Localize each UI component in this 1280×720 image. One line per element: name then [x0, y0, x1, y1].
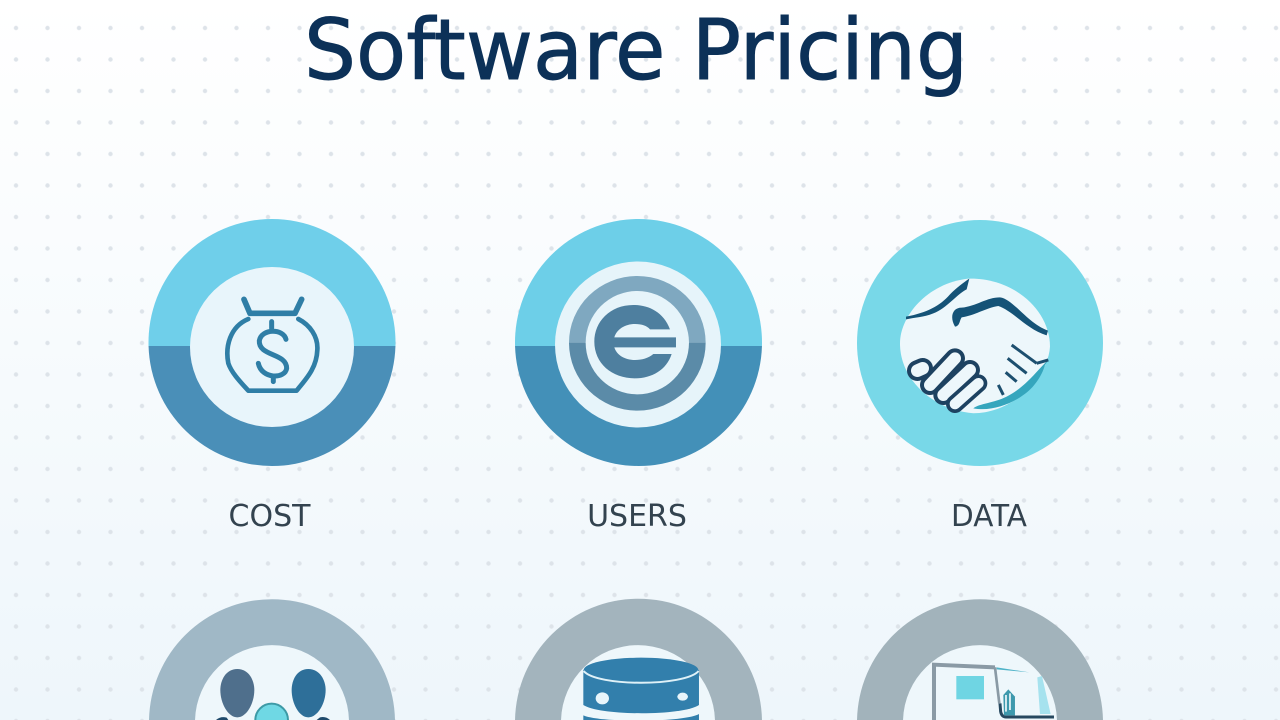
icon: cost disc: [148, 219, 396, 466]
label: cost: COST: [229, 499, 311, 534]
icon: database ring: [515, 599, 762, 720]
icon: e symbol: [569, 276, 706, 411]
icon: data disc: [857, 220, 1103, 466]
panel: document: [857, 599, 1103, 720]
title: Software Pricing: [304, 1, 968, 99]
panel: cost: [148, 219, 396, 534]
icon: document ring: [857, 599, 1103, 720]
icon: money bag: [227, 299, 317, 391]
label: data: DATA: [951, 499, 1027, 534]
icon: people ring: [149, 599, 395, 720]
panel: people: [149, 599, 395, 720]
label: users: USERS: [587, 499, 687, 534]
icon: handshake: [900, 279, 1050, 413]
icon: window sketch: [934, 665, 1054, 720]
panel: database: [515, 599, 762, 720]
panel: users: [515, 219, 762, 534]
icon: people group: [216, 669, 330, 720]
icon: database cylinder: [583, 658, 699, 720]
panel: data: [857, 220, 1103, 534]
icon: users disc: [515, 219, 762, 466]
